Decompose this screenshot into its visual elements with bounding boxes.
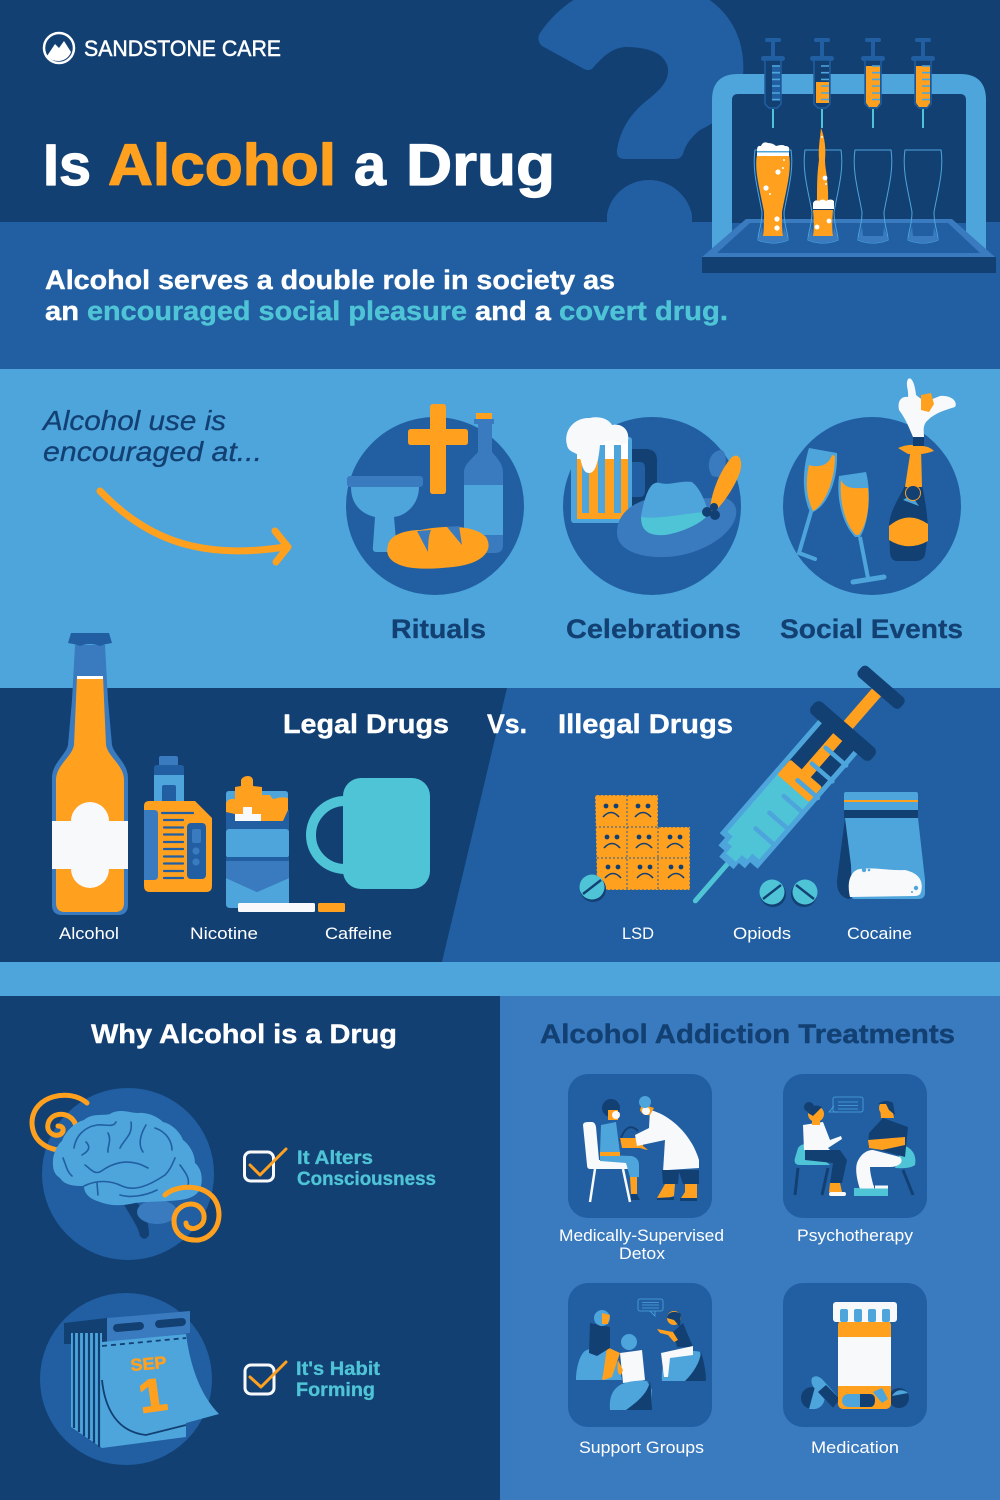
champagne flute right — [838, 472, 884, 582]
treatment labels: Support Groups — [579, 1439, 704, 1457]
panel: why alcohol is a drug — [0, 996, 500, 1500]
treatment labels: Medically-Supervised — [559, 1227, 724, 1245]
heading: Alcohol Addiction Treatments — [540, 1019, 955, 1049]
beer stein — [566, 417, 657, 523]
logo — [44, 33, 281, 63]
icon: calendar — [40, 1293, 219, 1465]
beer glass: empty — [854, 150, 892, 243]
beer glass: empty — [904, 150, 942, 243]
icon: brain — [32, 1088, 219, 1260]
card: psychotherapy — [783, 1074, 927, 1218]
treatment labels: Psychotherapy — [797, 1227, 914, 1245]
text: alters consciousness — [297, 1148, 436, 1190]
cross — [408, 404, 468, 494]
text: habit forming — [296, 1359, 381, 1401]
card: medication — [783, 1283, 927, 1427]
heading: legal drugs: Legal Drugs — [283, 709, 449, 739]
syringe: full — [911, 38, 935, 128]
title: Is — [43, 133, 91, 198]
icon: vape — [144, 756, 212, 892]
bread — [387, 526, 489, 569]
icon: calendar: SEP — [130, 1353, 167, 1375]
drug labels: Opiods — [733, 924, 791, 943]
icon: syringe — [665, 656, 916, 927]
syringe: full — [861, 38, 885, 128]
panel: encouraged at — [0, 369, 1000, 689]
champagne flute left — [799, 448, 837, 559]
labels: Celebrations — [566, 614, 741, 644]
text: habit forming: Forming — [296, 1380, 375, 1401]
checkbox — [245, 1362, 286, 1394]
icon: cocaine bag — [837, 792, 925, 899]
lead-in text: encouraged at... — [43, 436, 262, 467]
goblet — [347, 476, 423, 552]
syringe: empty — [761, 38, 785, 128]
drug labels: Nicotine — [190, 924, 258, 943]
subtitle: Alcohol serves a double role in society as — [45, 265, 615, 295]
lead-in text: Alcohol use is — [41, 405, 226, 436]
title: Alcohol — [108, 133, 336, 198]
panel: alcohol addiction treatments — [500, 996, 1000, 1500]
title: Drug — [406, 133, 555, 198]
text: alters consciousness: It Alters — [297, 1148, 373, 1169]
icon: rituals — [346, 404, 524, 595]
treatment labels: Detox — [619, 1245, 666, 1263]
panel: header — [0, 0, 1000, 370]
icon: opioid pills — [760, 880, 818, 907]
text: alters consciousness: Consciousness — [297, 1169, 436, 1190]
drug labels — [59, 924, 912, 943]
subtitle: covert drug. — [559, 296, 728, 326]
syringe: half — [810, 38, 834, 128]
card: medically-supervised detox — [568, 1074, 712, 1218]
beer glass: full — [754, 142, 792, 243]
text: habit forming: It's Habit — [296, 1359, 381, 1380]
hat — [617, 450, 741, 557]
lead-in text — [41, 405, 262, 467]
labels: Rituals — [391, 614, 486, 644]
drug labels: Caffeine — [325, 924, 392, 943]
drug labels: LSD — [622, 924, 654, 943]
icon: beer tap with syringes — [702, 38, 996, 273]
drug labels: Alcohol — [59, 924, 119, 943]
icon: lsd tabs — [580, 795, 690, 902]
heading: Why Alcohol is a Drug — [91, 1019, 397, 1049]
icon: beer bottle — [52, 633, 128, 915]
title — [43, 133, 555, 198]
icon: question mark — [538, 0, 743, 223]
beer glass: pouring — [804, 128, 842, 243]
labels: Social Events — [780, 614, 963, 644]
heading: illegal drugs: Illegal Drugs — [558, 709, 733, 739]
icon: celebrations — [563, 417, 741, 595]
labels — [391, 614, 963, 644]
icon: cigarette pack — [226, 776, 345, 912]
subtitle: and a — [475, 296, 551, 326]
arrow — [100, 491, 288, 562]
icon: calendar: 1 — [135, 1368, 170, 1423]
subtitle — [45, 265, 728, 326]
treatment labels — [559, 1227, 914, 1457]
heading: versus: Vs. — [487, 709, 527, 739]
logo: SANDSTONE CARE — [84, 36, 281, 61]
icon: coffee mug — [311, 778, 430, 889]
card: support groups — [568, 1283, 712, 1427]
subtitle: an — [45, 296, 79, 326]
panel: legal vs illegal — [0, 633, 1000, 962]
checkbox — [244, 1149, 286, 1181]
drug labels: Cocaine — [847, 924, 912, 943]
subtitle: encouraged social pleasure — [87, 296, 467, 326]
treatment labels: Medication — [811, 1439, 899, 1457]
champagne bottle — [889, 378, 956, 561]
band — [0, 962, 1000, 996]
title: a — [354, 133, 387, 198]
icon: social events — [783, 378, 961, 595]
wine bottle — [464, 413, 503, 553]
